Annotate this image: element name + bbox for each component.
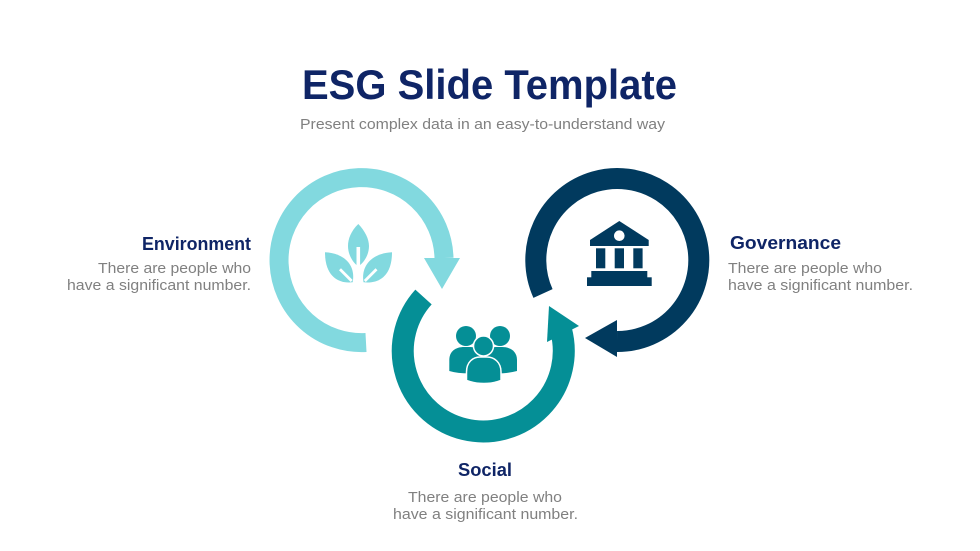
environment label: There are people who: [98, 260, 251, 277]
governance label: have a significant number.: [728, 277, 913, 294]
social arrow ring: [403, 297, 579, 431]
social label: [393, 459, 578, 523]
environment arrow ring: [279, 178, 460, 343]
governance label: There are people who: [728, 260, 882, 277]
subtitle: Present complex data in an easy-to-understand way: [300, 116, 666, 133]
title: ESG Slide Template: [302, 61, 677, 108]
social label: There are people who: [408, 489, 562, 506]
icon: bank: [587, 221, 652, 286]
icon: people: [449, 326, 517, 384]
environment label: Environment: [142, 233, 251, 254]
environment label: have a significant number.: [67, 277, 251, 294]
icon: leaves: [325, 224, 392, 283]
environment label: [67, 233, 251, 294]
governance arrow ring: [536, 179, 699, 357]
social label: have a significant number.: [393, 506, 578, 523]
social label: Social: [458, 459, 512, 480]
governance label: [728, 232, 913, 294]
governance label: Governance: [730, 232, 841, 253]
